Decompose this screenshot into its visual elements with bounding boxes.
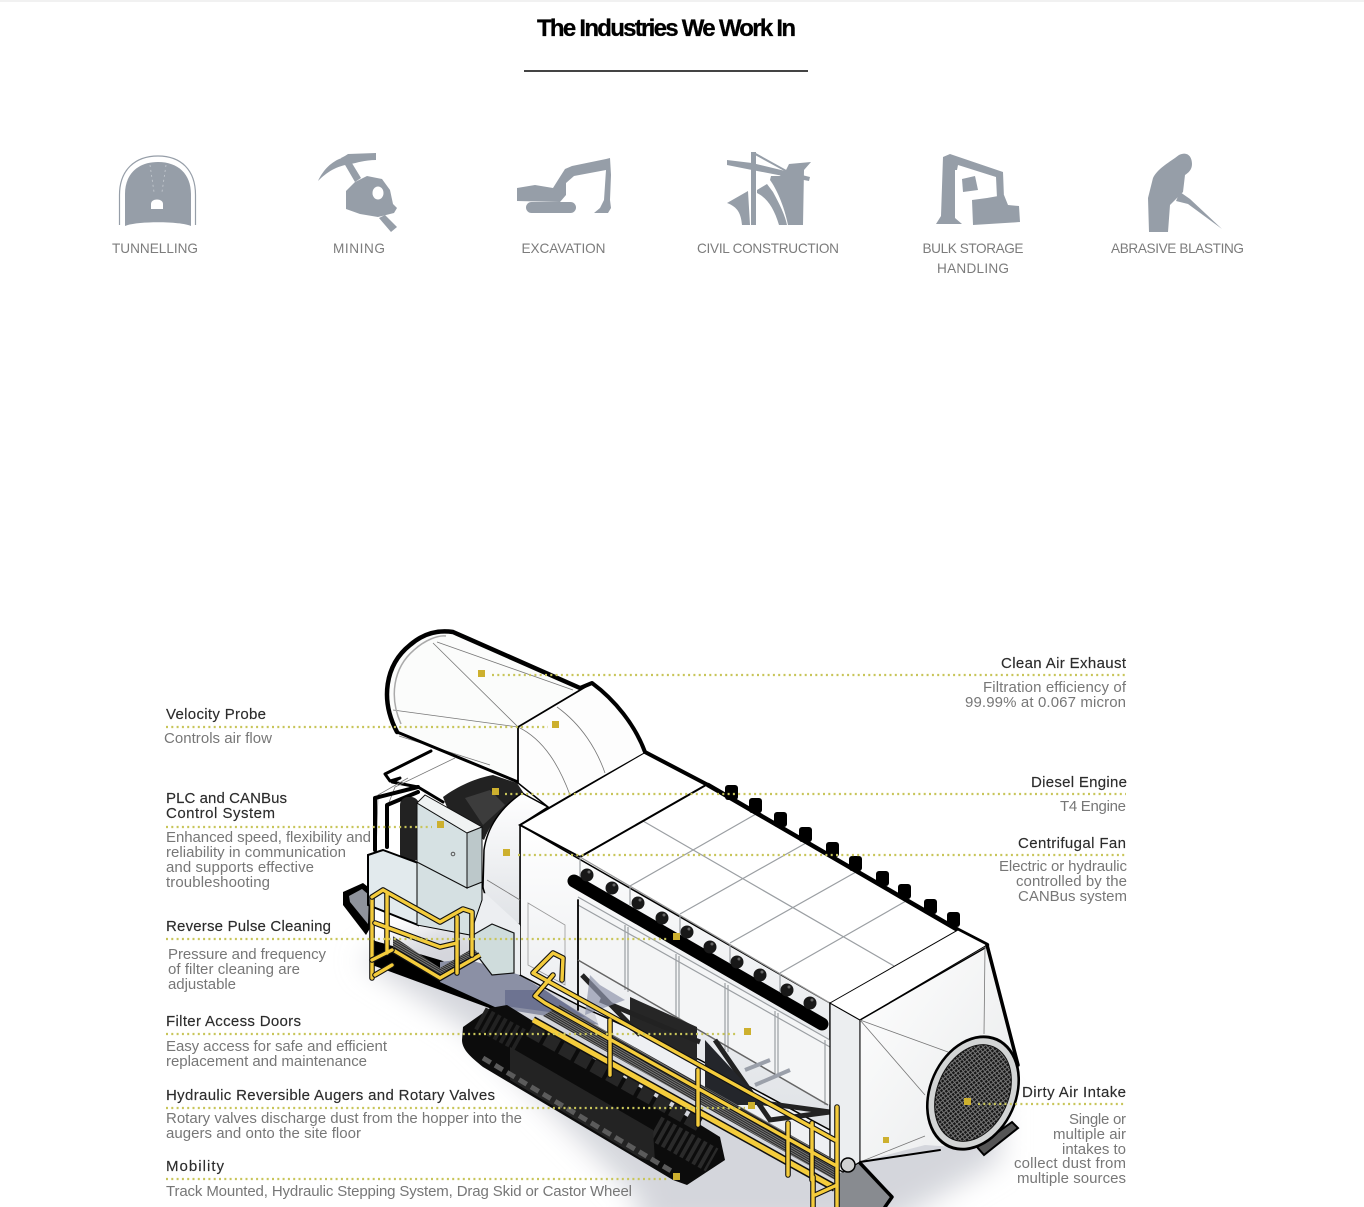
callout: plc and canbus control system [166,790,444,891]
dirty air intake grille [908,1020,1038,1166]
roof edge nozzles [725,785,960,927]
callout: filter access doors: replacement and maintenance [166,1053,367,1070]
icon: excavation [517,158,611,213]
lower fan wall [470,893,520,975]
callout: diesel engine [492,774,1127,815]
callout: reverse pulse cleaning [166,918,680,993]
callout: centrifugal fan [503,835,1128,905]
label: bulk storage handling: HANDLING [937,261,1009,276]
callout: plc and canbus control system: and supports effective [166,859,314,876]
callout: centrifugal fan: Centrifugal Fan [1018,835,1126,852]
label: tunnelling: TUNNELLING [112,241,198,256]
exhaust cone [387,631,580,782]
callout: dirty air intake: Single or [1069,1111,1126,1128]
callout: centrifugal fan: Electric or hydraulic [999,858,1128,875]
label: bulk storage handling: BULK STORAGE [922,241,1024,256]
icon: tunnelling [120,156,196,226]
callout: centrifugal fan: controlled by the [1016,873,1127,890]
under filter bay [578,960,838,1165]
industries icon row [112,152,1244,276]
wheel hub [841,1158,855,1172]
engine compartment [443,775,525,840]
callout: reverse pulse cleaning: Pressure and frequency [168,946,326,963]
callout: reverse pulse cleaning: Reverse Pulse Cleaning [166,918,331,935]
label: abrasive blasting: ABRASIVE BLASTING [1111,241,1244,256]
callout: velocity probe [164,706,559,747]
callout: clean air exhaust: Clean Air Exhaust [1001,655,1127,672]
label: mining: MINING [333,241,385,256]
callout: diesel engine: Diesel Engine [1031,774,1127,791]
callout: mobility: Track Mounted, Hydraulic Stepping System, Drag Skid or Castor Wheel [166,1183,632,1200]
callout: plc and canbus control system: troubleshooting [166,874,270,891]
machine cutaway illustration [343,631,1038,1207]
callout: centrifugal fan: CANBus system [1018,888,1127,905]
title: The Industries We Work In [537,15,796,42]
callout: plc and canbus control system: reliability in communication [166,844,346,861]
label: excavation: EXCAVATION [522,241,606,256]
callout: dirty air intake [883,1084,1126,1187]
icon: bulk storage handling [936,154,1020,225]
callout: mobility [166,1158,680,1200]
label: civil construction: CIVIL CONSTRUCTION [697,241,839,256]
callout: reverse pulse cleaning: adjustable [168,976,236,993]
callout: hydraulic reversible augers and rotary valves: augers and onto the site floor [166,1125,361,1142]
air deck and frame [375,751,517,862]
small side cabinet [368,850,418,925]
exhaust elbow [518,683,708,807]
hopper and struts [582,975,830,1120]
callout: hydraulic reversible augers and rotary valves [166,1087,755,1142]
callout: dirty air intake: multiple air [1053,1126,1126,1143]
fan housing [483,793,548,925]
crawler track [462,1005,725,1185]
upper left walkway and handrail [372,890,480,978]
icon: civil construction [727,152,811,225]
callout: dirty air intake: intakes to [1062,1141,1126,1158]
ground shadow [360,920,1000,1207]
chassis beam [343,883,892,1207]
callout: filter access doors: Easy access for safe and efficient [166,1038,388,1055]
callout: mobility: Mobility [166,1158,224,1175]
callout: dirty air intake: Dirty Air Intake [1022,1084,1126,1101]
callout: reverse pulse cleaning: of filter cleaning are [168,961,300,978]
callout: velocity probe: Controls air flow [164,730,272,747]
filter access panels [578,897,830,1105]
callout: plc and canbus control system: Enhanced speed, flexibility and [166,829,371,846]
label: bulk storage handling [922,241,1024,276]
roof [520,752,987,1030]
callout: filter access doors [166,1013,751,1070]
callout: diesel engine: T4 Engine [1060,798,1126,815]
fan end shell [830,930,1018,1172]
callout: velocity probe: Velocity Probe [166,706,266,723]
callout: filter access doors: Filter Access Doors [166,1013,301,1030]
side wall [520,825,830,1130]
callout: hydraulic reversible augers and rotary valves: Rotary valves discharge dust from the hopper into the [166,1110,522,1127]
callout: clean air exhaust [478,655,1127,711]
control cabinet [417,795,482,935]
callout: hydraulic reversible augers and rotary valves: Hydraulic Reversible Augers and Rotary Valves [166,1087,495,1104]
icon: abrasive blasting [1148,154,1222,232]
callout: clean air exhaust: Filtration efficiency of [983,679,1127,696]
callout: dirty air intake: multiple sources [1017,1170,1126,1187]
icon: mining [318,153,397,232]
small power box [473,924,514,975]
callout: plc and canbus control system: PLC and CANBus [166,790,287,807]
pulse manifold [574,868,822,1024]
callout: dirty air intake: collect dust from [1014,1155,1126,1172]
callout: clean air exhaust: 99.99% at 0.067 micron [965,694,1126,711]
lower walkway and handrail [533,953,837,1207]
callout: plc and canbus control system: Control System [166,805,275,822]
